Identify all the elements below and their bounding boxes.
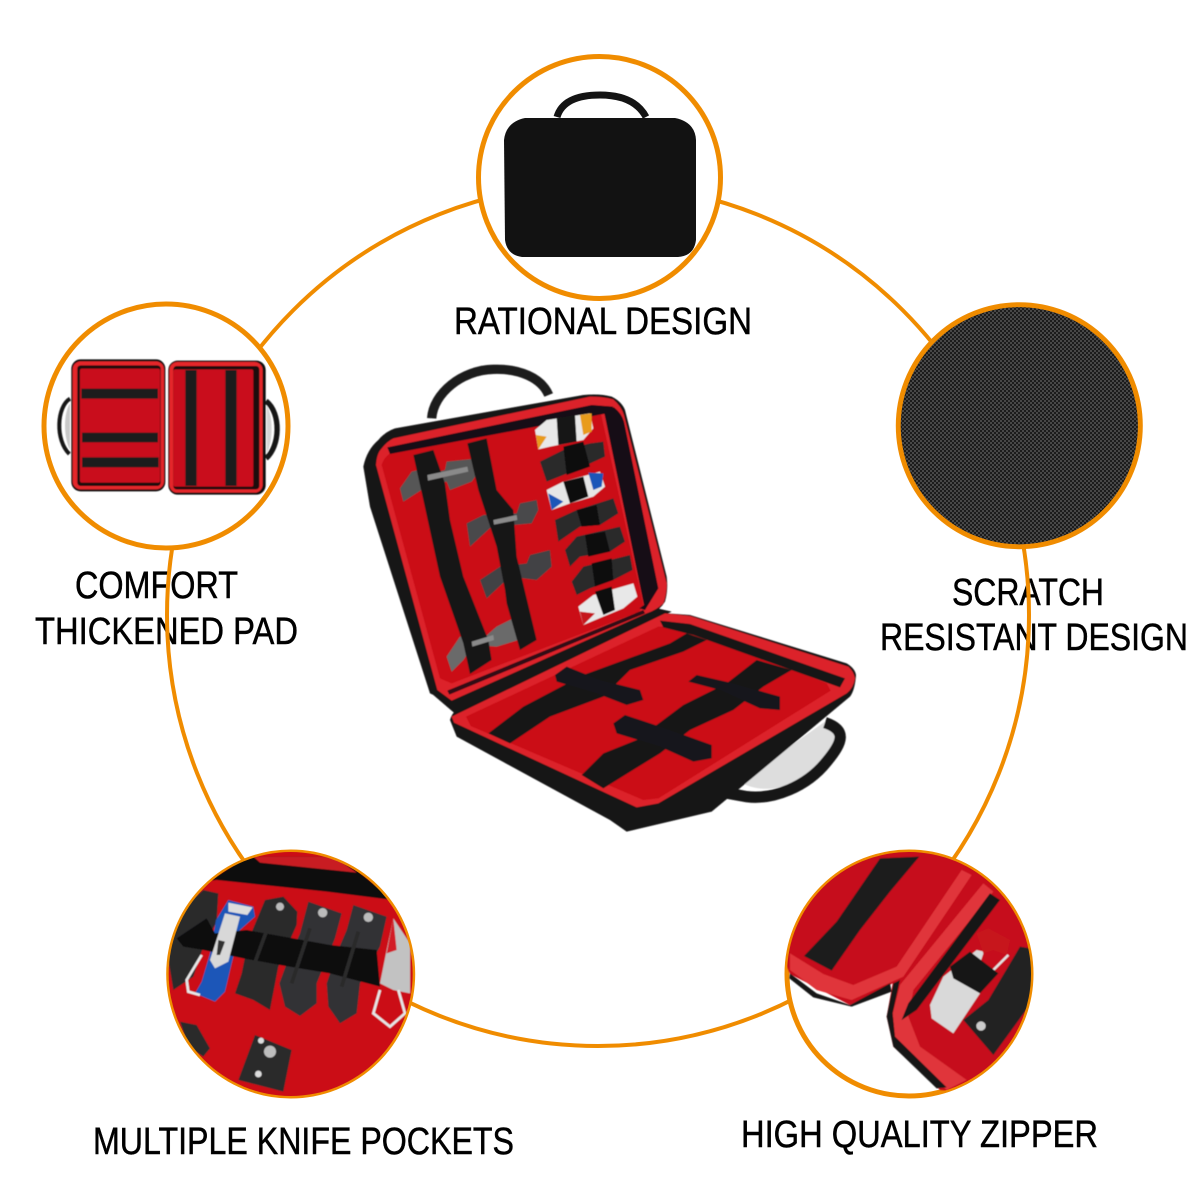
knife: black: [963, 946, 1031, 1056]
panel: scratch resistant design: [898, 305, 1140, 547]
handle: top: [432, 369, 549, 418]
texture swatch: [901, 307, 1138, 544]
icon: right handle: [266, 401, 277, 458]
inner dark wall: [902, 893, 1000, 1020]
zipper base: [887, 980, 947, 1088]
case backdrop: [787, 852, 1028, 1091]
panel: high quality zipper: [780, 850, 1040, 1100]
panel: multiple knife pockets: [160, 850, 420, 1100]
lid top black strip: [387, 405, 613, 454]
knife: silver blade over strap: [210, 913, 240, 968]
carabiner: white: [187, 955, 202, 995]
heading: high quality zipper: HIGH QUALITY ZIPPER: [741, 1114, 1098, 1156]
knife: hooked black two: [327, 905, 387, 1023]
knife: hooked black one: [279, 902, 342, 1016]
icon: left handle: [59, 399, 70, 454]
lid bottom dark seam: [447, 610, 645, 695]
knife: lower left fragment: [180, 1022, 210, 1057]
handle: bottom: [710, 722, 840, 797]
hinge between lid and base: [433, 607, 672, 715]
panel: open knife case: [363, 369, 856, 832]
knife: blue: [195, 900, 255, 1002]
panel: comfort thickened pad: [44, 304, 288, 548]
case lid: [363, 394, 667, 704]
heading: thickened pad: THICKENED PAD: [35, 611, 298, 653]
knife group: dark left: [167, 890, 218, 990]
connecting orange ring: [167, 184, 1029, 1046]
case base: [450, 613, 856, 832]
elastic straps in base: [488, 633, 707, 743]
knife: serrated black: [235, 897, 297, 1010]
knives in base: [555, 667, 643, 705]
knife: silver and red: [930, 950, 984, 1033]
open case left half: [71, 359, 165, 491]
heading: multiple knife pockets: MULTIPLE KNIFE POCKETS: [93, 1121, 514, 1163]
zipper lid: [789, 973, 892, 1007]
elastic strap: [804, 857, 919, 971]
heading: comfort: COMFORT: [75, 565, 238, 607]
knife: clip lines: [253, 922, 358, 987]
knife: red silver: [380, 918, 410, 993]
lid rim: [790, 870, 972, 1000]
elastic straps in lid: [413, 438, 537, 674]
base rim: [893, 883, 993, 1090]
icon: closed case handle: [557, 95, 646, 117]
knives in lid, right column: [535, 413, 637, 625]
heading: rational design: RATIONAL DESIGN: [454, 301, 752, 343]
icon: closed case body: [504, 118, 696, 257]
elastic strap: [177, 918, 380, 987]
open case right half: [168, 361, 266, 495]
knife: lower centre: [238, 1035, 292, 1092]
heading: scratch: SCRATCH: [952, 572, 1104, 614]
lid right black wall: [603, 407, 658, 610]
panel: rational design: [478, 56, 720, 298]
knives in lid, left pair: [400, 458, 552, 672]
